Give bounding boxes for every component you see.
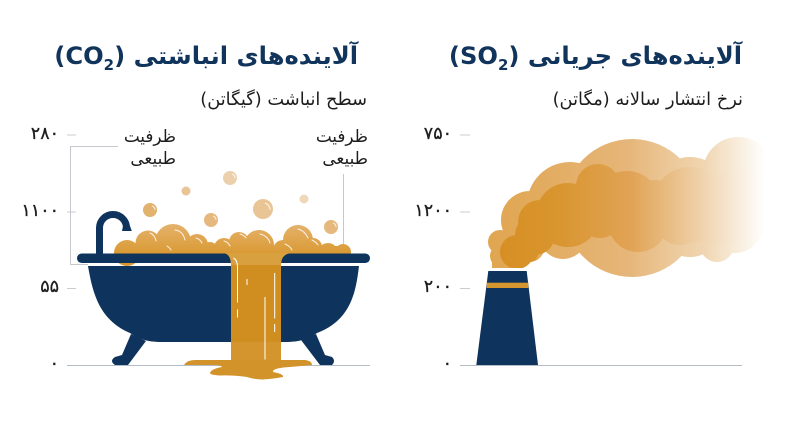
axis labels: left chart: ۵۵ <box>40 277 59 297</box>
icon: chimney <box>476 271 538 365</box>
axis labels: right chart <box>414 124 452 374</box>
foam highlights <box>150 229 318 250</box>
capacity brackets <box>70 146 344 264</box>
label: natural capacity right: طبیعی <box>322 148 368 168</box>
foam <box>114 224 351 266</box>
axis lines and ticks: right chart <box>460 135 742 366</box>
axis labels: right chart: ۲۰۰ <box>424 277 452 297</box>
overflow stream <box>222 253 293 360</box>
subtitle: stock level: سطح انباشت (گیگاتن) <box>200 89 367 110</box>
axis labels: left chart <box>21 124 59 374</box>
icon: smoke cloud <box>485 137 773 277</box>
puddle <box>184 360 312 380</box>
axis labels: left chart: ۲۸۰ <box>31 124 59 144</box>
axis labels: right chart: ۷۵۰ <box>424 124 452 144</box>
faucet <box>100 214 132 254</box>
title: flow pollutants: آلاینده‌های جریانی (SO2) <box>449 42 742 74</box>
icon: bathtub <box>77 171 370 380</box>
label: natural capacity right: ظرفیت <box>316 126 368 146</box>
label: natural capacity right <box>316 126 368 168</box>
tub rim <box>77 254 370 263</box>
floating bubbles <box>143 171 338 234</box>
axis labels: right chart: ۱۲۰۰ <box>414 201 452 221</box>
label: natural capacity left: طبیعی <box>130 148 176 168</box>
label: natural capacity left: ظرفیت <box>124 126 176 146</box>
axis labels: right chart: ۰ <box>443 354 452 374</box>
tub body and legs <box>88 266 359 365</box>
label: natural capacity left <box>124 126 176 168</box>
axis labels: left chart: ۰ <box>50 354 59 374</box>
subtitle: annual emission rate: نرخ انتشار سالانه (مگاتن) <box>553 89 743 110</box>
axis lines and ticks: left chart <box>67 135 370 366</box>
axis labels: left chart: ۱۱۰۰ <box>21 201 59 221</box>
title: stock pollutants: آلاینده‌های انباشتی (CO2) <box>54 42 358 74</box>
